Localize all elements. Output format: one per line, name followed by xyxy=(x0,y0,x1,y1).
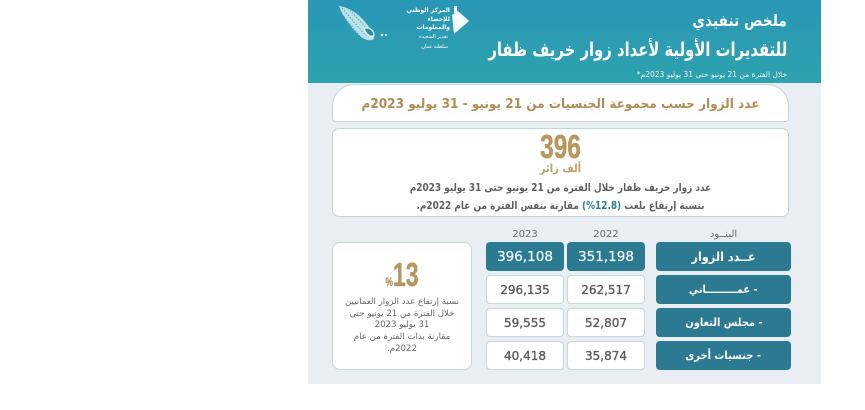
text: growth description: 2022م. xyxy=(387,344,417,354)
icon: Dhofar feather logo xyxy=(339,6,388,40)
value: others 2023 xyxy=(486,341,564,370)
text: growth description: خلال الفترة من 21 يونيو حتى xyxy=(350,309,454,319)
text: growth description: 31 يوليو 2023 xyxy=(375,320,429,330)
row label: number of visitors: عــدد الزوار xyxy=(692,249,755,264)
text: period note: خلال الفترة من 21 يونيو حتى 31 يوليو 2023م* xyxy=(637,70,787,79)
value: Omani 2022 xyxy=(567,275,645,304)
row label: GCC xyxy=(656,308,791,337)
heading: visitors by nationality group: عدد الزوار حسب مجموعة الجنسيات من 21 يونيو - 31 يوليو 2023م xyxy=(361,97,760,112)
label: items column: البنــود xyxy=(710,229,737,240)
table: 2022 values xyxy=(567,242,645,370)
text: growth description: نسبة إرتفاع عدد الزوار العمانيين xyxy=(345,297,459,307)
value: GCC 2022 xyxy=(567,308,645,337)
panel: page background xyxy=(308,0,821,384)
value: GCC 2022: 52,807 xyxy=(585,316,627,330)
value: Omani 2022: 262,517 xyxy=(581,282,631,296)
label: column 2022: 2022 xyxy=(593,229,619,240)
number: 396: 396 xyxy=(540,128,581,165)
text: growth description xyxy=(345,297,459,354)
value: total 2023 xyxy=(486,242,564,271)
value: Omani 2023 xyxy=(486,275,564,304)
panel: omani visitors growth xyxy=(332,242,472,370)
text: centre name: للإحصاء xyxy=(428,16,450,22)
value: others 2023: 40,418 xyxy=(504,348,546,362)
heading: main title: للتقديرات الأولية لأعداد زوار خريف ظفار xyxy=(488,39,787,61)
panel: section title card xyxy=(332,84,789,122)
text: thousand visitors: ألف زائر xyxy=(540,162,581,175)
value: total 2022 xyxy=(567,242,645,271)
value: others 2022: 35,874 xyxy=(585,348,627,362)
text: growth description: مقارنة بذات الفترة من عام xyxy=(354,332,450,342)
text: description: بنسبة إرتفاع بلغت (12.8%) مقارنة بنفس الفترة من عام 2022م. xyxy=(416,200,705,212)
text: logo caption: سلطنة عمان xyxy=(421,44,448,50)
row label: Omani xyxy=(656,275,791,304)
panel: total visitors card xyxy=(332,128,789,217)
text: centre name: المركز الوطني xyxy=(406,7,450,14)
row label: Omani: - عمـــــــــاني xyxy=(689,283,758,296)
text: logo caption: تقدير السعيدة xyxy=(419,34,448,40)
number: 13 percent: %13 xyxy=(385,256,419,293)
value: GCC 2023 xyxy=(486,308,564,337)
value: others 2022 xyxy=(567,341,645,370)
value: total 2023: 396,108 xyxy=(497,248,553,264)
row label: other nationalities: - جنسيات أخرى xyxy=(686,349,761,362)
icon: logo mark xyxy=(452,6,469,34)
text: centre name xyxy=(406,7,450,31)
icon: national centre logo xyxy=(406,6,469,50)
heading: executive summary: ملخص تنفيذي xyxy=(693,11,787,30)
text: description xyxy=(410,182,711,212)
text: logo caption xyxy=(419,34,448,50)
table: 2023 values xyxy=(486,242,564,370)
row label: other nationalities xyxy=(656,341,791,370)
text: description: عدد زوار خريف ظفار خلال الفترة من 21 يونيو حتى 31 يوليو 2023م xyxy=(410,182,711,194)
text: centre name: والمعلومات xyxy=(416,24,450,31)
row label: GCC: - مجلس التعاون xyxy=(685,316,762,329)
label: column 2023: 2023 xyxy=(512,229,538,240)
panel: header banner xyxy=(308,0,821,83)
row label: number of visitors xyxy=(656,242,791,271)
value: total 2022: 351,198 xyxy=(578,248,634,264)
value: Omani 2023: 296,135 xyxy=(500,282,550,296)
value: GCC 2023: 59,555 xyxy=(504,316,546,330)
